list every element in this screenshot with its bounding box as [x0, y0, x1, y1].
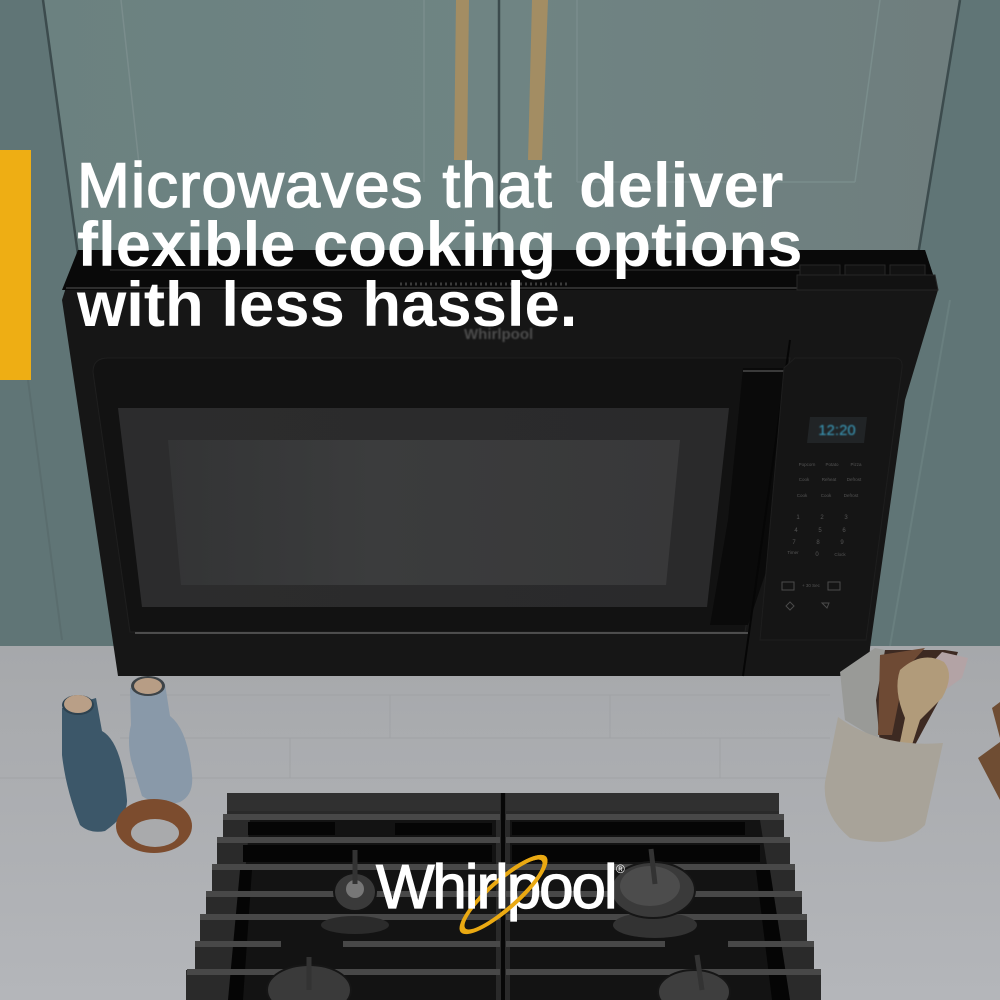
- microwave window inner: [168, 440, 680, 585]
- microwave body: [62, 250, 938, 676]
- keypad labels: 7: [792, 540, 796, 546]
- Whirlpool logo: ®: [616, 862, 625, 876]
- keypad labels: 6: [842, 528, 846, 534]
- microwave door: [93, 358, 790, 632]
- keypad labels: Pizza: [850, 462, 862, 467]
- keypad labels: Clock: [834, 552, 846, 557]
- keypad labels: Cook: [799, 477, 810, 482]
- dark pepper mill: [62, 695, 127, 832]
- title: deliver: [579, 151, 783, 221]
- keypad labels: Timer: [787, 550, 799, 555]
- keypad labels: 0: [815, 552, 819, 558]
- keypad labels: 2: [820, 515, 824, 521]
- vent box: [797, 265, 938, 290]
- utensil crock: [825, 648, 968, 842]
- light pepper mill: [129, 676, 192, 804]
- keypad labels: 8: [816, 540, 820, 546]
- background: countertop and backsplash: [0, 646, 1000, 1000]
- title: with less hassle.: [76, 270, 577, 340]
- yellow accent bar: [0, 150, 31, 380]
- microwave window: [118, 408, 729, 607]
- gas stove grate: [186, 793, 821, 1000]
- display: [807, 417, 867, 443]
- keypad labels: Popcorn: [799, 462, 816, 467]
- top grate blocks: [227, 793, 779, 811]
- keypad labels: 9: [840, 540, 844, 546]
- Whirlpool logo: Whirlpool: [376, 853, 616, 922]
- keypad labels: Potato: [825, 462, 839, 467]
- keypad labels: Defrost: [847, 477, 862, 482]
- panel buttons: [782, 582, 840, 610]
- keypad labels: 3: [844, 515, 848, 521]
- keypad labels: [787, 462, 862, 588]
- door handle: [710, 368, 785, 625]
- keypad labels: Cook: [821, 493, 832, 498]
- title: Microwaves that: [77, 151, 553, 221]
- microwave body: 12:20: [818, 422, 856, 439]
- wooden boards: [978, 702, 1000, 800]
- keypad labels: 1: [796, 515, 800, 521]
- keypad labels: 4: [794, 528, 798, 534]
- cabinet handles: [454, 0, 548, 160]
- salt bowl: [116, 799, 192, 853]
- control panel: [760, 358, 902, 640]
- keypad labels: 5: [818, 528, 822, 534]
- burners: [267, 849, 730, 1000]
- keypad labels: Defrost: [844, 493, 859, 498]
- keypad labels: Reheat: [822, 477, 837, 482]
- grate bars: [187, 814, 821, 975]
- title: flexible cooking options: [77, 210, 803, 280]
- keypad labels: Cook: [797, 493, 808, 498]
- title: [76, 151, 803, 340]
- background: kitchen cabinets: [0, 0, 1000, 648]
- small logo on the microwave: Whirlpool: [464, 326, 533, 343]
- bottom trim line: [135, 632, 748, 634]
- keypad labels: + 30 Sec: [802, 583, 821, 588]
